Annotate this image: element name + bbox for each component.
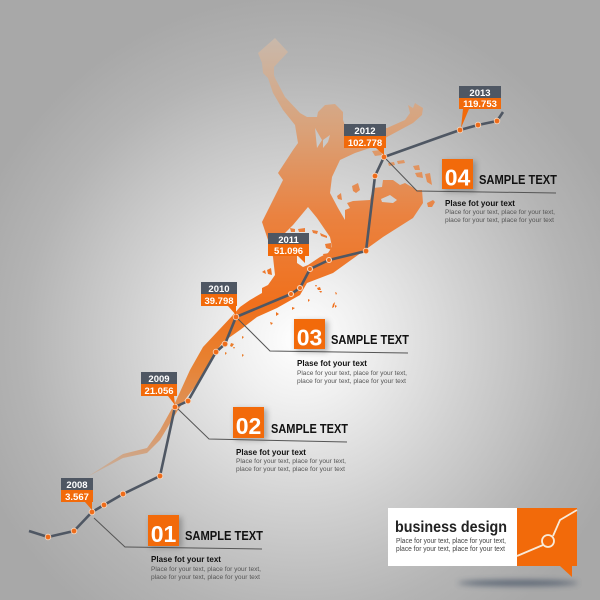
splash blobs	[225, 150, 435, 357]
tag: 2010: 39.798	[204, 296, 234, 307]
callout 02: 02	[236, 413, 261, 439]
icon: white line with node	[517, 510, 577, 556]
callout 04: 04	[445, 164, 470, 190]
callout 04: Plase fot your text	[445, 198, 515, 208]
callout 03: Place for your text, place for your text,	[297, 370, 407, 377]
tag: 2010	[201, 282, 237, 315]
tag: 2008: 3.567	[65, 492, 89, 503]
callout 01: Place for your text, place for your text,	[151, 566, 261, 573]
business design card	[388, 508, 578, 586]
business design card: Place for your text, place for your text,	[396, 538, 506, 545]
tag: 2008	[61, 478, 93, 510]
tag: 2013: 119.753	[463, 99, 497, 110]
callout 03: place for your text, place for your text	[297, 378, 406, 385]
callout 03: Plase fot your text	[297, 358, 367, 368]
callout 01: SAMPLE TEXT	[185, 528, 263, 543]
tag: 2012	[344, 124, 386, 155]
callout 01: 01	[151, 521, 176, 547]
tag: 2011: 51.096	[274, 246, 303, 257]
tag: 2011	[268, 233, 309, 263]
callout 03: 03	[297, 324, 322, 350]
business design card: business design	[395, 519, 507, 536]
callout 02: SAMPLE TEXT	[271, 421, 348, 436]
tag: 2009	[141, 372, 177, 405]
callout 04	[386, 159, 557, 224]
tag: 2013	[459, 86, 501, 128]
callout 02: place for your text, place for your text	[236, 466, 345, 473]
figure: jumping businessman on splash board	[87, 38, 435, 477]
tag: 2009: 21.056	[144, 386, 174, 397]
callout 01: place for your text, place for your text	[151, 574, 260, 581]
data points	[45, 118, 500, 540]
tag: 2012: 2012	[354, 126, 376, 137]
callout 03: SAMPLE TEXT	[331, 332, 409, 347]
tag: 2013: 2013	[469, 88, 491, 99]
tag: 2009: 2009	[148, 374, 170, 385]
tag: 2011: 2011	[278, 235, 300, 246]
tag: 2008: 2008	[66, 480, 88, 491]
business design card: place for your text, place for your text	[396, 546, 505, 553]
callout 01: Plase fot your text	[151, 554, 221, 564]
callout 01	[94, 515, 263, 581]
callout 04: place for your text, place for your text	[445, 217, 554, 224]
callout 04: SAMPLE TEXT	[479, 172, 557, 187]
callout 02	[178, 407, 348, 473]
callout 03	[238, 319, 409, 385]
tag: 2012: 102.778	[348, 138, 382, 149]
tag: 2010: 2010	[208, 284, 230, 295]
callout 02: Plase fot your text	[236, 447, 306, 457]
line chart	[29, 112, 503, 540]
callout 02: Place for your text, place for your text,	[236, 458, 346, 465]
callout 04: Place for your text, place for your text,	[445, 209, 555, 216]
